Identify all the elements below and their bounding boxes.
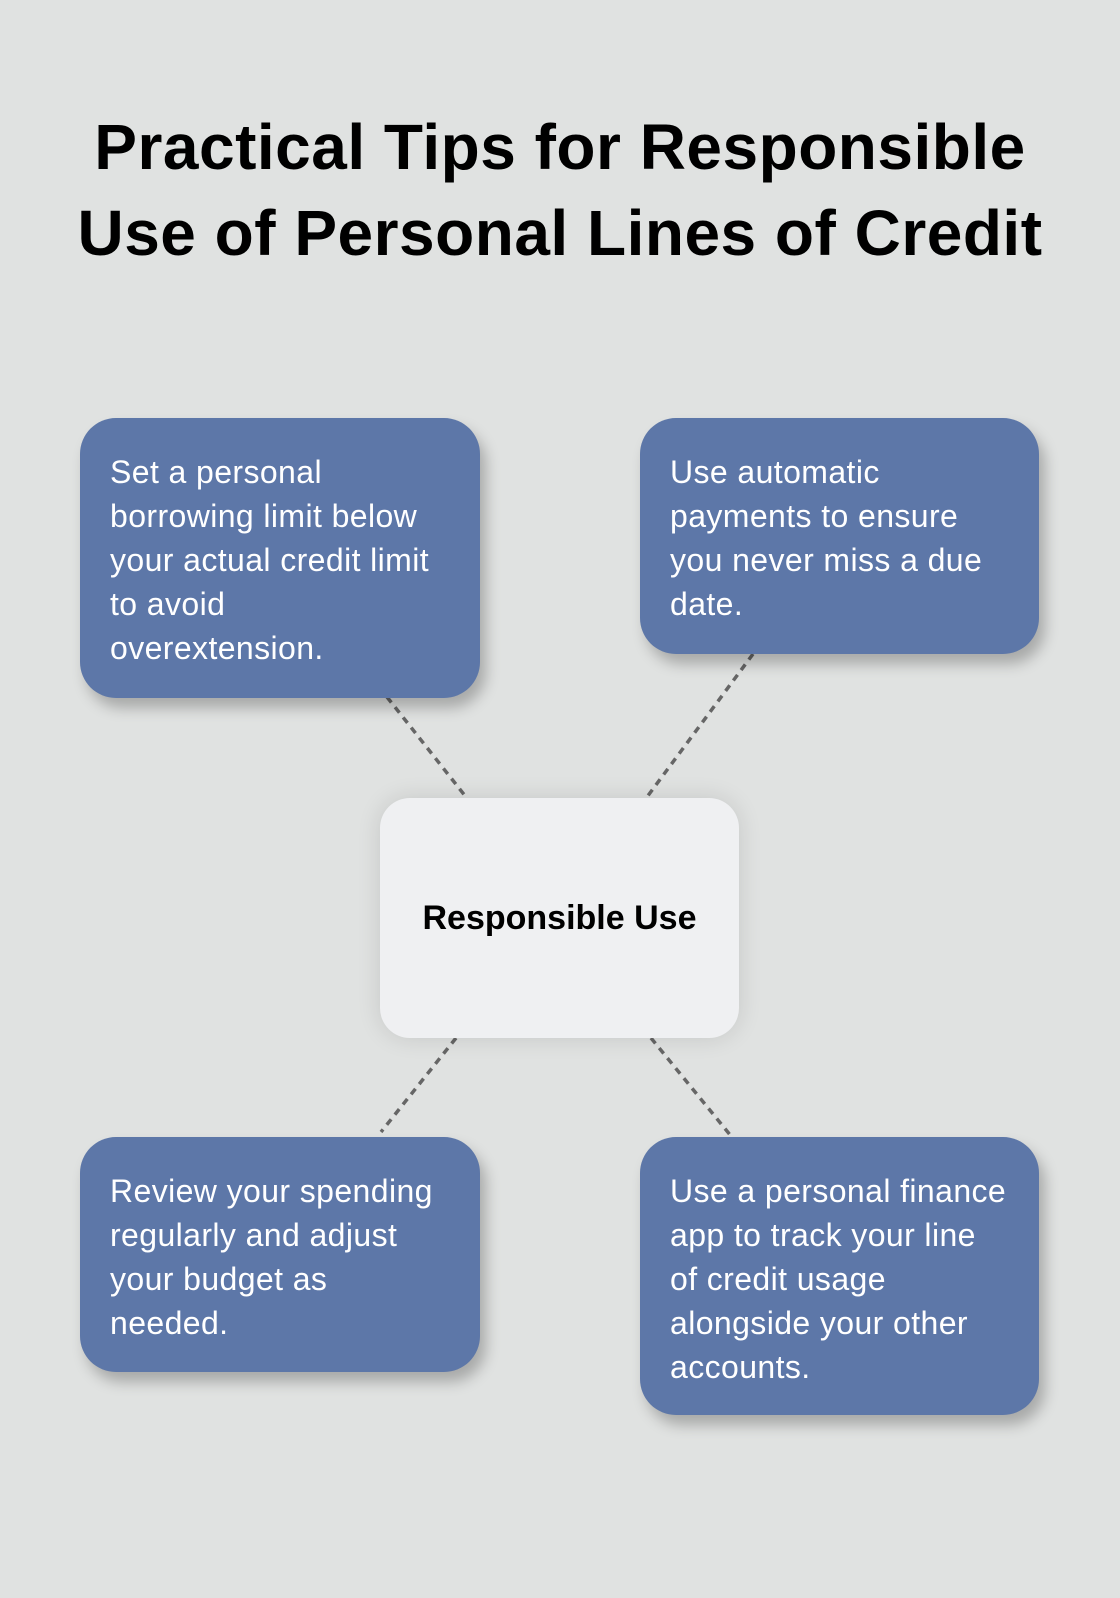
panel: tip top-right: date. xyxy=(670,586,743,622)
panel: tip bottom-right: Use a personal finance xyxy=(670,1173,1006,1209)
panel: tip top-right: payments to ensure xyxy=(670,498,958,534)
panel: tip top-left: your actual credit limit xyxy=(110,542,429,578)
panel: tip bottom-left: needed. xyxy=(110,1305,228,1341)
title xyxy=(77,111,1043,269)
panel: tip bottom-right xyxy=(640,1137,1039,1415)
panel: tip bottom-left xyxy=(80,1137,480,1372)
panel: tip bottom-right: app to track your line xyxy=(670,1217,976,1253)
panel: tip top-left xyxy=(80,418,480,698)
panel: tip top-left: overextension. xyxy=(110,630,324,666)
title: Practical Tips for Responsible xyxy=(94,111,1026,183)
panel: tip bottom-left: your budget as xyxy=(110,1261,327,1297)
panel: tip top-left: to avoid xyxy=(110,586,225,622)
title: Use of Personal Lines of Credit xyxy=(77,197,1043,269)
panel: tip bottom-right: accounts. xyxy=(670,1349,811,1385)
center node: Responsible Use xyxy=(422,898,696,936)
panel: tip bottom-left: Review your spending xyxy=(110,1173,433,1209)
panel: tip top-left: borrowing limit below xyxy=(110,498,417,534)
panel: tip top-right: you never miss a due xyxy=(670,542,982,578)
panel: tip top-right xyxy=(640,418,1039,654)
center node xyxy=(380,798,739,1038)
panel: tip bottom-right: alongside your other xyxy=(670,1305,968,1341)
panel: tip top-right: Use automatic xyxy=(670,454,880,490)
panel: tip top-left: Set a personal xyxy=(110,454,322,490)
panel: tip bottom-left: regularly and adjust xyxy=(110,1217,397,1253)
panel: tip bottom-right: of credit usage xyxy=(670,1261,886,1297)
